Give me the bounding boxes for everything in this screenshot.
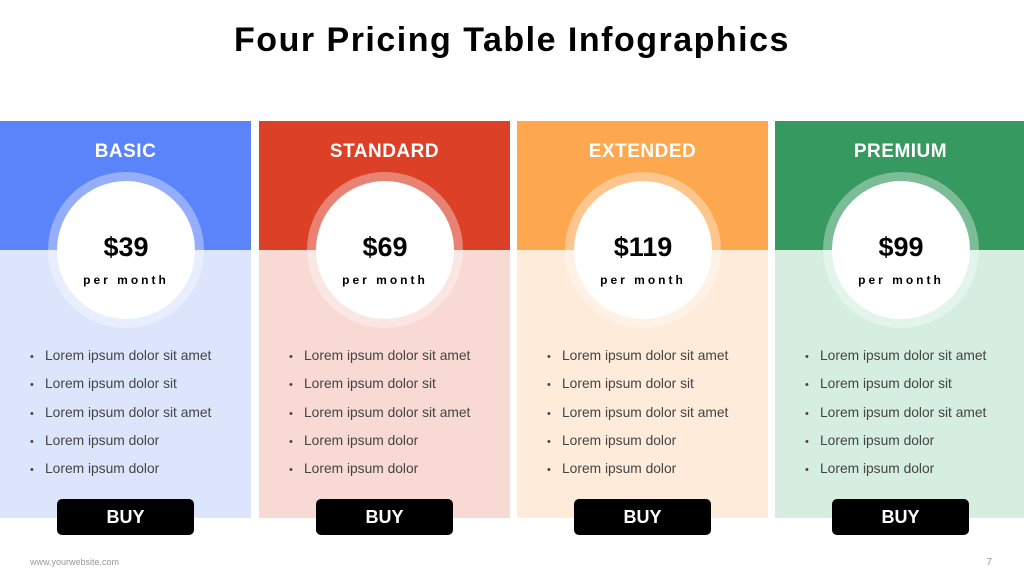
features list: extended: Lorem ipsum dolor sit amet bbox=[562, 348, 728, 363]
features list: extended bbox=[547, 348, 728, 476]
heading: extended: EXTENDED bbox=[589, 141, 696, 162]
price circle: basic bbox=[57, 181, 195, 319]
features list: premium bbox=[805, 348, 986, 476]
features list: standard: Lorem ipsum dolor sit amet bbox=[304, 405, 470, 420]
page number: 7 bbox=[986, 557, 992, 568]
button: standard: BUY bbox=[365, 507, 404, 527]
price circle: standard bbox=[316, 181, 454, 319]
panel: extended bbox=[517, 121, 768, 535]
footer: website: www.yourwebsite.com bbox=[30, 557, 119, 567]
features list: premium: Lorem ipsum dolor bbox=[820, 433, 934, 448]
features list: basic bbox=[30, 348, 212, 476]
features list: basic: Lorem ipsum dolor bbox=[45, 433, 159, 448]
features list: basic: Lorem ipsum dolor sit amet bbox=[45, 405, 211, 420]
features list: extended: Lorem ipsum dolor bbox=[562, 461, 676, 476]
button: standard bbox=[316, 499, 453, 535]
price circle: basic: per month bbox=[83, 273, 169, 287]
price circle: basic: $39 bbox=[103, 232, 149, 262]
price circle: premium: $99 bbox=[878, 232, 924, 262]
heading: standard: STANDARD bbox=[330, 141, 439, 162]
button: premium: BUY bbox=[881, 507, 920, 527]
button: basic: BUY bbox=[106, 507, 144, 527]
price circle: extended bbox=[574, 181, 712, 319]
features list: basic: Lorem ipsum dolor bbox=[45, 461, 159, 476]
button: basic bbox=[57, 499, 194, 535]
features list: standard bbox=[289, 348, 470, 476]
features list: basic: Lorem ipsum dolor sit bbox=[45, 376, 177, 391]
price circle: standard: $69 bbox=[362, 232, 408, 262]
price circle: standard: per month bbox=[342, 273, 428, 287]
features list: basic: Lorem ipsum dolor sit amet bbox=[45, 348, 211, 363]
title: Four Pricing Table Infographics bbox=[234, 21, 790, 59]
panel: basic bbox=[0, 121, 251, 535]
heading: premium: PREMIUM bbox=[854, 141, 947, 162]
button: extended: BUY bbox=[623, 507, 662, 527]
features list: premium: Lorem ipsum dolor sit bbox=[820, 376, 952, 391]
price circle: premium bbox=[832, 181, 970, 319]
features list: premium: Lorem ipsum dolor sit amet bbox=[820, 348, 986, 363]
features list: standard: Lorem ipsum dolor sit amet bbox=[304, 348, 470, 363]
features list: premium: Lorem ipsum dolor bbox=[820, 461, 934, 476]
button: extended bbox=[574, 499, 711, 535]
features list: premium: Lorem ipsum dolor sit amet bbox=[820, 405, 986, 420]
price circle: extended: $119 bbox=[614, 232, 672, 262]
price circle: premium: per month bbox=[858, 273, 944, 287]
panel: premium bbox=[775, 121, 1024, 535]
panel: standard bbox=[259, 121, 510, 535]
features list: extended: Lorem ipsum dolor sit amet bbox=[562, 405, 728, 420]
features list: standard: Lorem ipsum dolor bbox=[304, 433, 418, 448]
button: premium bbox=[832, 499, 969, 535]
features list: standard: Lorem ipsum dolor sit bbox=[304, 376, 436, 391]
heading: basic: BASIC bbox=[95, 141, 156, 162]
features list: standard: Lorem ipsum dolor bbox=[304, 461, 418, 476]
features list: extended: Lorem ipsum dolor bbox=[562, 433, 676, 448]
price circle: extended: per month bbox=[600, 273, 686, 287]
features list: extended: Lorem ipsum dolor sit bbox=[562, 376, 694, 391]
